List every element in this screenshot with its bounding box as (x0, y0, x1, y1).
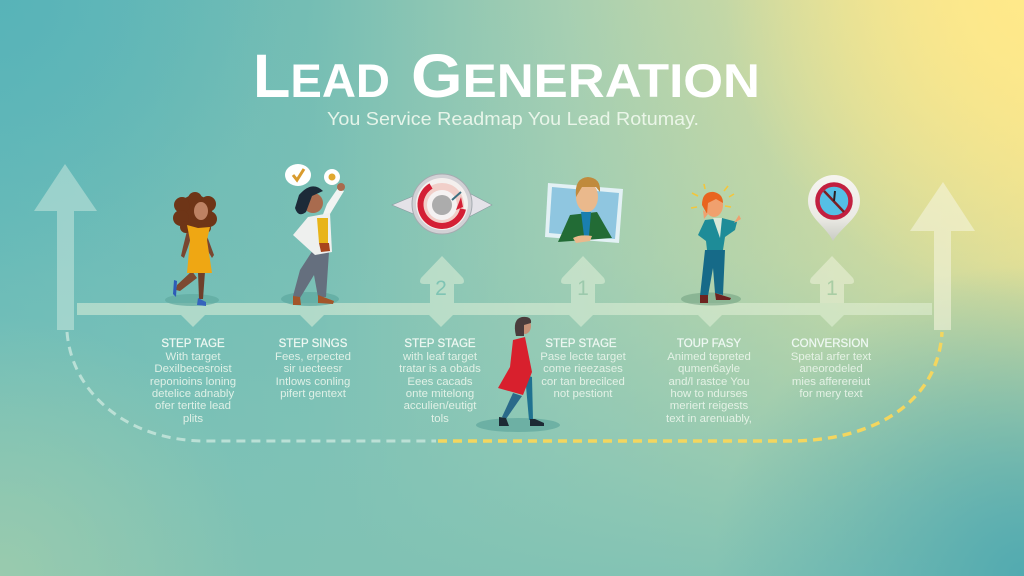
up arrow marker 1: 1 (577, 277, 589, 300)
up arrow marker 2: 2 (435, 277, 447, 300)
step 1 text: STEP TAGE (161, 338, 225, 350)
icon: speech bubble check (285, 164, 311, 186)
step 1 text: plits (183, 413, 203, 425)
icon: framed businessman portrait (545, 177, 623, 243)
persona: redhead thinking man (681, 184, 741, 306)
step 4 text: Pase lecte target (540, 351, 627, 363)
dashed path: completed portion (67, 332, 436, 441)
step 5 text: Animed tepreted (667, 351, 751, 363)
step 3 text: onte mitelong (406, 388, 474, 400)
persona: woman in yellow dress (165, 192, 219, 306)
step 3 text: with leaf target (402, 351, 478, 363)
step 6 text: conversion (791, 338, 872, 400)
up arrow marker 1 (561, 256, 605, 303)
step 5 text: qumen6ayle (678, 363, 740, 375)
step 5 text: TOUP FASY (677, 338, 741, 350)
icon: location pin (808, 175, 860, 241)
up arrow marker 1 conversion (810, 256, 854, 303)
step 4 text: STEP STAGE (545, 338, 617, 350)
step 2 text: pifert gentext (280, 388, 347, 400)
up arrow marker 1 conversion: 1 (826, 277, 838, 300)
step 1 text: ofer tertite lead (155, 400, 231, 412)
icon: target with wings (392, 174, 492, 234)
subtitle: You Service Readmap You Lead Rotumay. (327, 108, 699, 129)
step 2 text: Fees, erpected (275, 351, 351, 363)
step 5 text: how to ndurses (670, 388, 748, 400)
step 3 text (399, 338, 481, 425)
icon: speech bubble coin (324, 169, 340, 185)
step 4 text (540, 338, 627, 400)
step 2 text: Intlows conling (276, 376, 350, 388)
step 3 text: tratar is a obads (399, 363, 481, 375)
step 3 text: STEP STAGE (404, 338, 476, 350)
step 6 text: conversion: aneorodeled (799, 363, 863, 375)
title: LEAD (253, 42, 390, 110)
step 4 text: cor tan brecilced (541, 376, 625, 388)
persona: woman in red coat walking (476, 317, 560, 432)
step 1 text (150, 338, 236, 425)
step 5 text: and/l rastce You (668, 376, 750, 388)
step 1 text: reponioins loning (150, 376, 236, 388)
step 6 text: conversion: for mery text (799, 388, 863, 400)
up arrow marker 2 (420, 256, 464, 303)
step 2 text (275, 338, 351, 400)
step 3 text: acculien/eutigt (404, 400, 477, 412)
step 3 text: Eees cacads (407, 376, 473, 388)
step 2 text: STEP SINGS (279, 338, 348, 350)
step 4 text: not pestiont (554, 388, 613, 400)
left big arrow (34, 164, 97, 330)
step 6 text: conversion: Spetal arfer text (791, 351, 872, 363)
step 6 text: conversion: CONVERSION (791, 338, 869, 350)
step 1 text: detelice adnably (152, 388, 234, 400)
step 5 text: text in arenuably, (666, 413, 752, 425)
step 4 text: come rieezases (543, 363, 623, 375)
step 3 text: tols (431, 413, 449, 425)
right big arrow (910, 182, 975, 330)
timeline bar with step markers (77, 303, 932, 327)
title: GENERATION (411, 42, 760, 110)
step 1 text: Dexilbecesroist (154, 363, 232, 375)
step 5 text: meriert reigests (670, 400, 749, 412)
step 2 text: sir uecteesr (284, 363, 343, 375)
dashed path: upcoming portion (438, 332, 942, 441)
step 1 text: With target (165, 351, 221, 363)
persona: person with speech bubbles (281, 164, 345, 306)
step 5 text (666, 338, 752, 425)
title (253, 42, 760, 110)
step 6 text: conversion: mies afferereiut (792, 376, 871, 388)
